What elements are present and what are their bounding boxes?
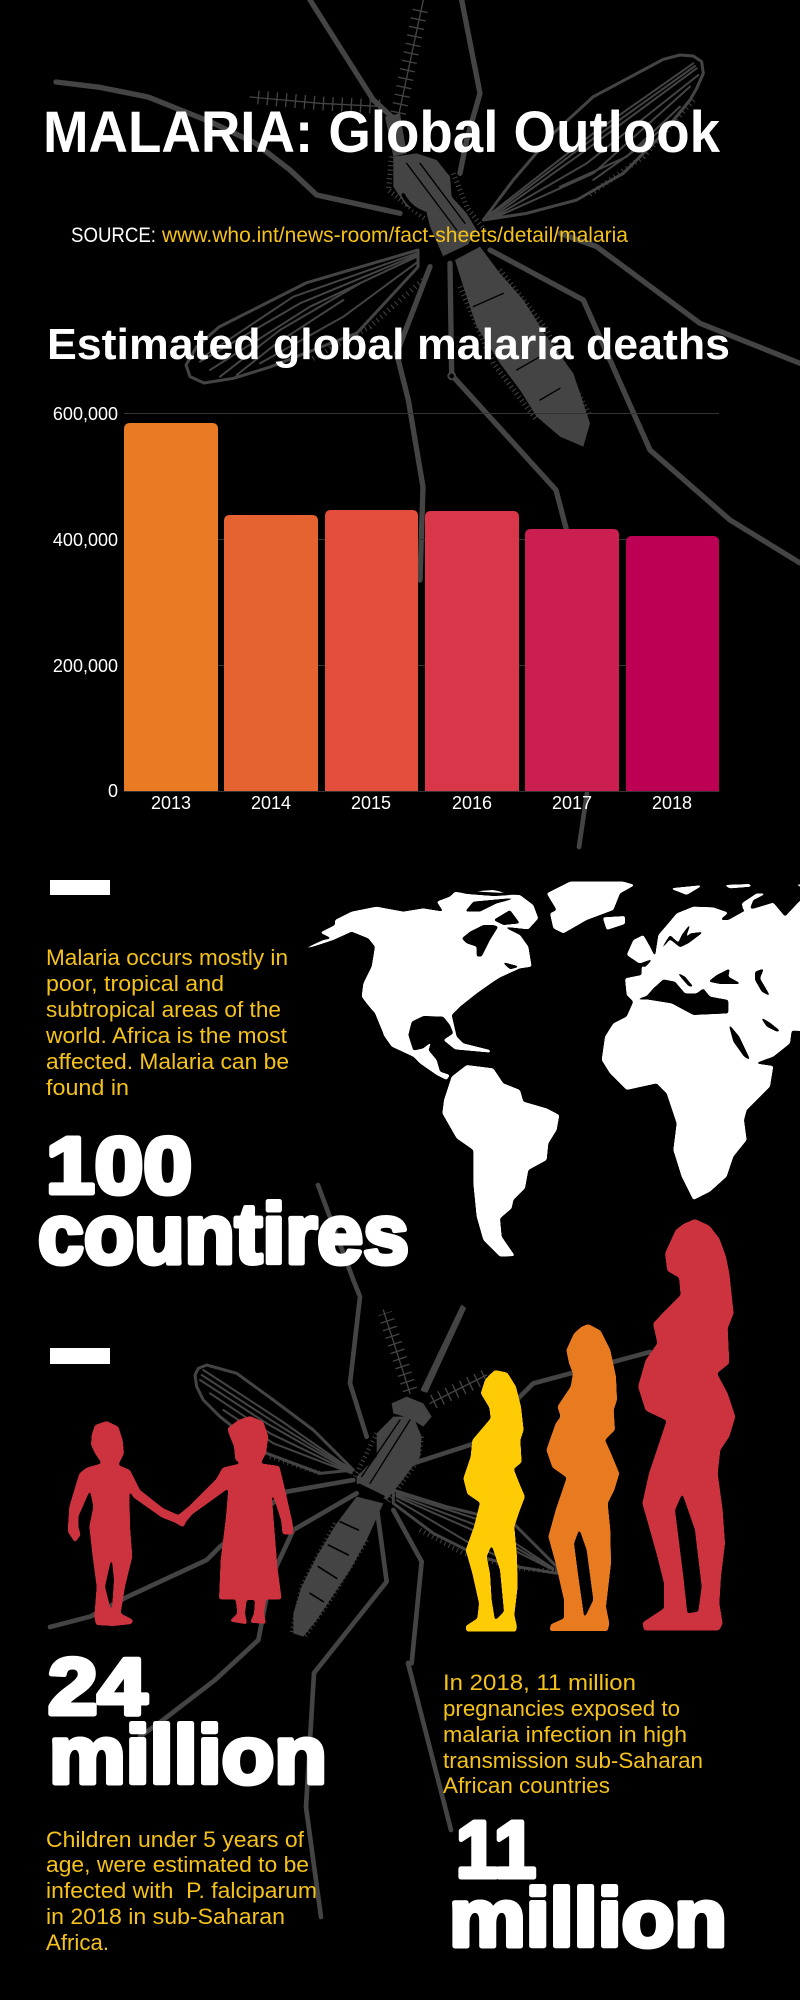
- stat: 24 million: [48, 1642, 327, 1801]
- x axis labels: 2018: [652, 793, 692, 813]
- map text block: [45, 945, 289, 1100]
- children text block: Children under 5 years of: [46, 1827, 305, 1852]
- icon: three pregnant women growing in size: [463, 1219, 735, 1632]
- x axis labels: 2015: [351, 793, 391, 813]
- source line: SOURCE:: [71, 224, 156, 247]
- chart heading: Estimated global malaria deaths: [47, 320, 730, 369]
- pregnancy text block: African countries: [443, 1773, 610, 1798]
- bar: 2018: [626, 536, 719, 791]
- pregnancy text block: In 2018, 11 million: [443, 1670, 636, 1695]
- pregnancy text block: pregnancies exposed to: [443, 1696, 680, 1721]
- map text block: world. Africa is the most: [45, 1023, 287, 1048]
- background mosquito: bottom: [50, 1185, 650, 1917]
- y axis labels: 200,000: [53, 656, 118, 676]
- x axis labels: 2016: [452, 793, 492, 813]
- bar: 2017: [525, 529, 619, 791]
- bar: 2014: [224, 515, 318, 791]
- x axis labels: 2017: [552, 793, 592, 813]
- source line: www.who.int/news-room/fact-sheets/detail/malaria: [161, 224, 628, 247]
- Arctic islands: [669, 884, 800, 912]
- x axis labels: [151, 793, 692, 813]
- pregnancy text block: [443, 1670, 703, 1798]
- stat: 100 countires: 100: [46, 1121, 192, 1210]
- title: MALARIA: Global Outlook: [43, 100, 721, 165]
- stat: 11 million: 11: [456, 1805, 536, 1894]
- y axis labels: 600,000: [53, 404, 118, 424]
- pregnant woman: orange: [546, 1324, 619, 1631]
- map text block: Malaria occurs mostly in: [46, 945, 288, 970]
- bar: 2015: [325, 510, 418, 791]
- stat: 24 million: million: [49, 1710, 327, 1801]
- stat: 24 million: 24: [48, 1642, 148, 1731]
- stat: 11 million: [449, 1805, 727, 1964]
- stat: 100 countires: countires: [38, 1187, 409, 1281]
- inland seas and bays: [373, 892, 792, 1061]
- map text block: poor, tropical and: [46, 971, 224, 996]
- South America: [442, 1065, 559, 1257]
- Iceland: [603, 916, 625, 930]
- background mosquito: top: [56, 0, 800, 847]
- bar: 2016: [425, 511, 519, 791]
- icon: two children holding hands: [68, 1416, 293, 1626]
- children text block: Africa.: [46, 1930, 109, 1955]
- pregnant woman: yellow: [463, 1370, 525, 1632]
- children text block: infected with P. falciparum: [46, 1878, 317, 1903]
- bar chart: estimated global malaria deaths: [53, 404, 719, 813]
- Greenland: [547, 882, 635, 933]
- pregnant woman: red: [638, 1219, 735, 1630]
- y axis labels: [53, 404, 118, 801]
- x axis labels: 2013: [151, 793, 191, 813]
- children text block: age, were estimated to be: [46, 1852, 309, 1877]
- children text block: [46, 1827, 317, 1955]
- map text block: affected. Malaria can be: [46, 1049, 289, 1074]
- y axis labels: 400,000: [53, 530, 118, 550]
- divider dash: children and pregnancy section: [50, 1348, 110, 1364]
- stat: 11 million: million: [449, 1873, 727, 1964]
- x axis labels: 2014: [251, 793, 291, 813]
- stat: 100 countires: [38, 1121, 409, 1281]
- map text block: subtropical areas of the: [46, 997, 281, 1022]
- divider dash: map section: [50, 880, 110, 895]
- pregnancy text block: transmission sub-Saharan: [443, 1748, 703, 1773]
- bar: 2013: [124, 423, 218, 791]
- Eurasia and Africa: [602, 897, 800, 1200]
- pregnancy text block: malaria infection in high: [443, 1722, 687, 1747]
- y axis labels: 0: [108, 781, 118, 801]
- children text block: in 2018 in sub-Saharan: [46, 1904, 285, 1929]
- map text block: found in: [46, 1075, 129, 1100]
- world map: [280, 870, 800, 1267]
